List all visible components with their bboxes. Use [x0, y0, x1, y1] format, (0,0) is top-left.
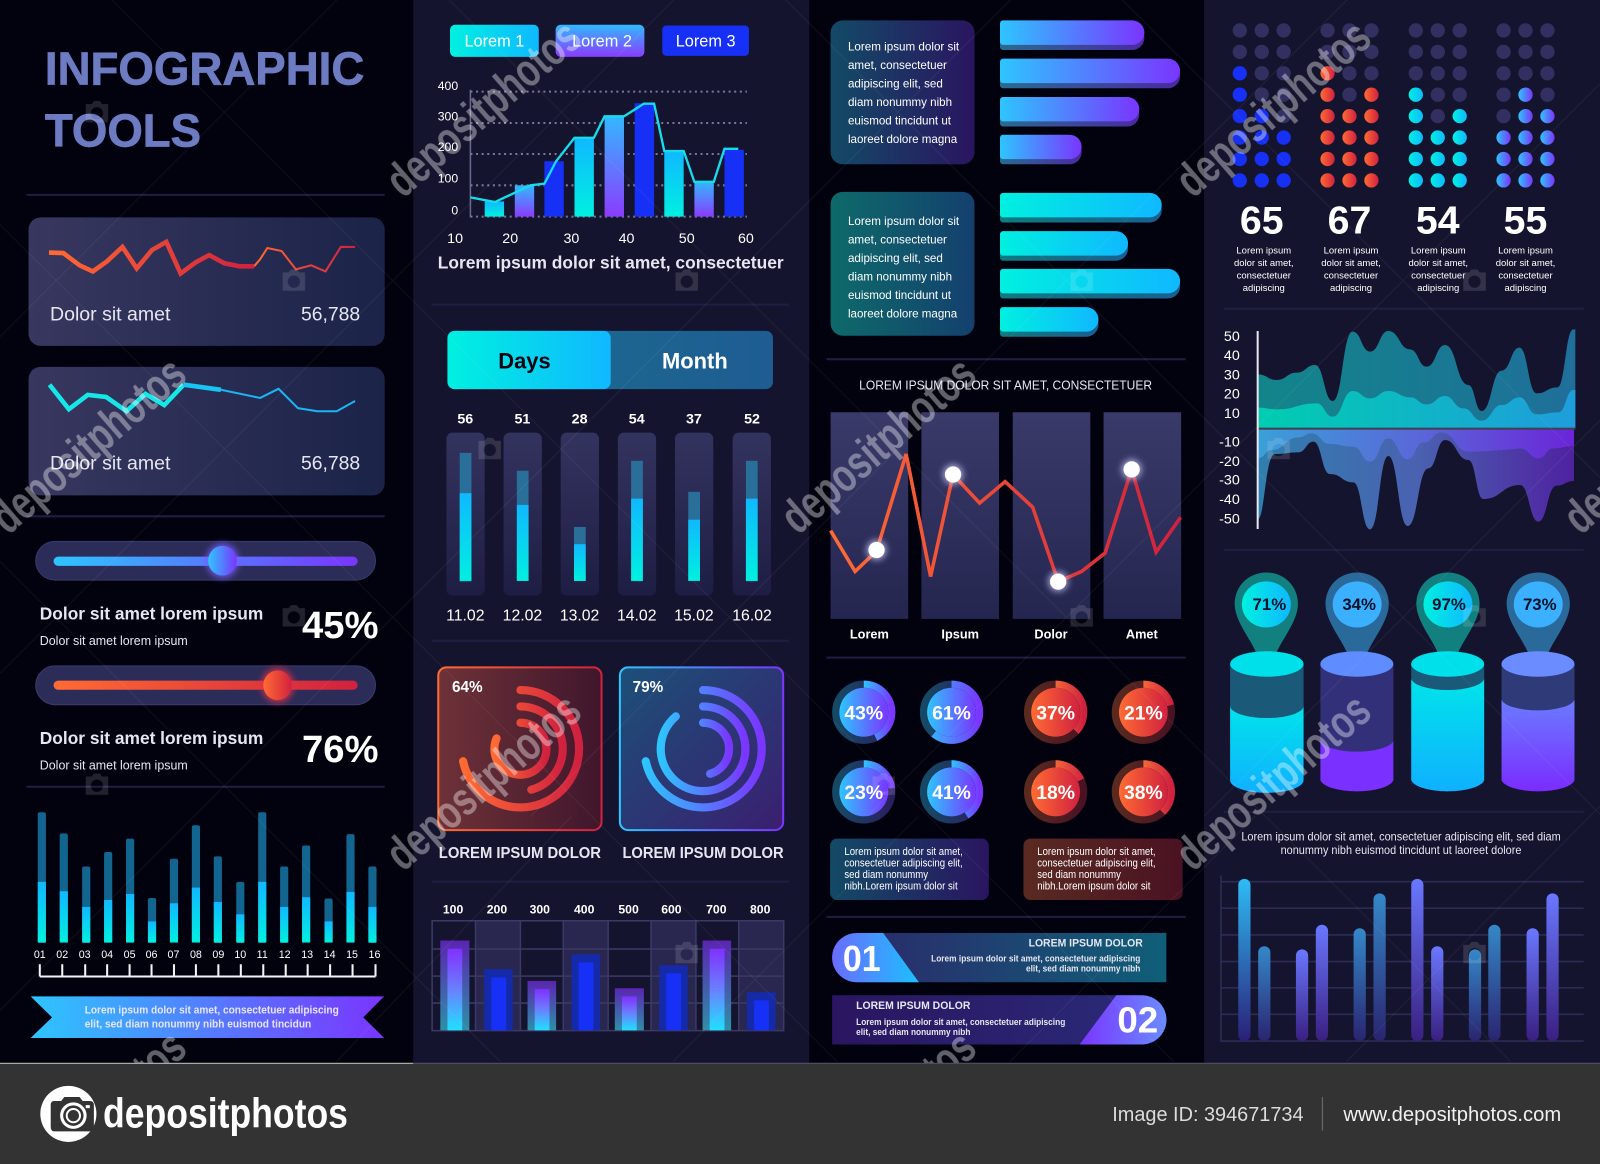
bar chart: 16 columns: 12: [279, 949, 291, 961]
title: TOOLS: [45, 104, 201, 156]
bar chart: 16 columns: 02: [56, 949, 68, 961]
area chart: mirrored: 20: [1224, 386, 1240, 402]
big numbers and captions: Lorem ipsum: [1498, 246, 1553, 257]
panel: sparkline card 1: 56,788: [301, 303, 360, 325]
note: red: [1023, 839, 1183, 900]
banner 02: [832, 995, 1166, 1044]
combo chart: bars and line: 20: [502, 231, 518, 247]
donut gauges: red: 18%: [1036, 782, 1075, 804]
panel: sparkline card 2: Dolor sit amet: [50, 452, 171, 474]
line chart over columns: Ipsum: [941, 626, 979, 641]
legend buttons: [450, 25, 749, 57]
footer bar: Image ID: 394671734: [1112, 1104, 1304, 1126]
pin cylinder: 73%: [1501, 572, 1574, 791]
note: blue: nibh.Lorem ipsum dolor sit: [844, 881, 958, 893]
panel: sparkline card 1: [29, 217, 385, 346]
slider 1 text: Dolor sit amet lorem ipsum: [40, 633, 188, 648]
bar chart: 16 columns: 13: [301, 949, 313, 961]
ribbon banner: [31, 996, 384, 1038]
area chart: mirrored: -50: [1219, 511, 1240, 527]
text box: purple: adipiscing elit, sed: [848, 78, 943, 91]
radial card: 79%: [620, 667, 783, 830]
big numbers and captions: consectetuer: [1498, 271, 1553, 282]
title: [45, 43, 364, 156]
radial card: 79%: 79%: [633, 679, 664, 696]
legend buttons: Lorem 2: [572, 32, 632, 50]
radial card captions: LOREM IPSUM DOLOR: [439, 845, 601, 862]
bar chart: 16 columns: 08: [190, 949, 202, 961]
area chart: mirrored: -10: [1219, 434, 1240, 450]
slider 1 text: [40, 603, 379, 648]
slider 2: [36, 666, 376, 705]
line chart over columns: [831, 412, 1181, 641]
bar chart: grid 100 to 800: 700: [706, 902, 727, 916]
pin cylinder: 73%: 73%: [1523, 595, 1557, 614]
banner 02: Lorem ipsum dolor sit amet, consectetuer adipiscing: [856, 1017, 1065, 1027]
combo chart: bars and line: [438, 79, 754, 247]
slider 2 text: 76%: [302, 728, 379, 770]
text box: purple: laoreet dolore magna: [848, 133, 958, 146]
combo chart: bars and line: 40: [619, 231, 635, 247]
bar chart: grid 100 to 800: 200: [487, 902, 507, 916]
bar chart: 16 columns: 16: [369, 949, 380, 961]
bar chart: 16 columns: 14: [324, 949, 336, 961]
text box: purple: Lorem ipsum dolor sit: [848, 41, 960, 54]
column chart: dates: 56: [457, 411, 473, 427]
big numbers and captions: 67: [1328, 198, 1371, 242]
watermark: stock photo overlay: depositphotos: [376, 683, 591, 880]
3d bars: cyan blue: [1000, 193, 1180, 337]
chart caption: Lorem ipsum dolor sit amet, consectetuer: [438, 252, 784, 272]
big numbers and captions: dolor sit amet,: [1496, 258, 1555, 269]
line chart over columns: Lorem: [850, 626, 889, 641]
radial card captions: [439, 845, 784, 862]
slider 2 text: [40, 728, 379, 772]
3d bars: blue purple: [1000, 20, 1180, 164]
text box: purple: [831, 20, 974, 164]
pin cylinder: 71%: 71%: [1253, 595, 1286, 614]
column chart: dates: [446, 411, 772, 624]
banner 02: elit, sed diam nonummy nibh: [856, 1027, 971, 1037]
note: red: Lorem ipsum dolor sit amet,: [1037, 846, 1156, 858]
bar chart: grid 100 to 800: [432, 902, 784, 1031]
toggle: days and month: [447, 331, 773, 389]
donut gauges: blue: 61%: [932, 702, 971, 724]
column chart: dates: 52: [744, 411, 760, 427]
bar chart: 16 columns: 03: [79, 949, 91, 961]
bar chart: 16 columns: 06: [146, 949, 158, 961]
text box: purple: amet, consectetuer: [848, 59, 947, 72]
combo chart: bars and line: 300: [438, 109, 458, 123]
column chart: dates: 14.02: [617, 607, 657, 624]
toggle: days and month: Month: [662, 348, 728, 373]
column chart: dates: 37: [686, 411, 702, 427]
donut gauges: blue: [836, 684, 980, 820]
text box: teal: adipiscing elit, sed: [848, 252, 943, 265]
bar chart: grid 100 to 800: 500: [618, 902, 639, 916]
banner 01: elit, sed diam nonummy nibh: [1026, 963, 1141, 973]
big numbers and captions: dolor sit amet,: [1321, 258, 1381, 269]
line chart over columns: Dolor: [1034, 626, 1068, 641]
note: blue: [830, 839, 989, 900]
column chart: dates: 54: [629, 411, 645, 427]
toggle: days and month: Days: [498, 348, 551, 373]
footer bar: www.depositphotos.com: [1342, 1104, 1561, 1126]
note: red: sed diam nonummy: [1037, 869, 1121, 881]
bar chart: 16 columns: [34, 812, 380, 977]
big numbers and captions: 54: [1416, 198, 1460, 242]
note: blue: sed diam nonummy: [844, 869, 929, 881]
pin cylinder: 34%: [1320, 572, 1393, 791]
big numbers and captions: adipiscing: [1243, 283, 1285, 294]
combo chart: bars and line: 30: [563, 231, 579, 247]
donut gauges: blue: 23%: [844, 782, 883, 804]
combo chart: bars and line: 0: [451, 203, 458, 217]
paragraph: [1241, 830, 1561, 857]
big numbers and captions: consectetuer: [1411, 271, 1465, 282]
donut gauges: red: 38%: [1124, 782, 1163, 804]
line chart heading: LOREM IPSUM DOLOR SIT AMET, CONSECTETUER: [859, 377, 1152, 392]
ribbon banner: Lorem ipsum dolor sit amet, consectetuer adipiscing: [85, 1004, 339, 1016]
bar chart: 16 columns: 11: [257, 949, 268, 961]
slider 2 text: Dolor sit amet lorem ipsum: [40, 728, 263, 748]
column chart: dates: 51: [515, 411, 530, 427]
banner 01: [832, 933, 1166, 982]
text box: teal: laoreet dolore magna: [848, 307, 958, 320]
combo chart: bars and line: 400: [438, 79, 458, 93]
slider 1 text: 45%: [302, 604, 379, 646]
donut gauges: blue: 41%: [932, 782, 971, 804]
donut gauges: red: 21%: [1124, 702, 1163, 724]
paragraph: Lorem ipsum dolor sit amet, consectetuer adipiscing elit, sed diam: [1241, 830, 1561, 843]
big numbers and captions: dolor sit amet,: [1234, 258, 1294, 269]
combo chart: bars and line: 200: [438, 140, 458, 154]
big numbers and captions: consectetuer: [1324, 271, 1378, 282]
area chart: mirrored: 30: [1224, 368, 1240, 384]
bar chart: 16 columns: 09: [212, 949, 224, 961]
bar chart: grid 100 to 800: 300: [530, 902, 550, 916]
bar chart: grid 100 to 800: 800: [750, 902, 771, 916]
area chart: mirrored: 10: [1224, 406, 1240, 422]
banner 01: 01: [843, 939, 881, 979]
footer logo: [40, 1086, 348, 1142]
area chart: mirrored: -30: [1219, 473, 1240, 489]
bar chart: 16 columns: 05: [124, 949, 136, 961]
big numbers and captions: adipiscing: [1504, 283, 1547, 294]
area chart: mirrored: -20: [1219, 454, 1240, 470]
watermark: stock photo overlay: depositphotos: [770, 347, 985, 543]
combo chart: bars and line: 50: [679, 231, 695, 247]
text box: purple: euismod tincidunt ut: [848, 114, 952, 127]
banner 01: Lorem ipsum dolor sit amet, consectetuer adipiscing: [931, 954, 1140, 964]
text box: teal: amet, consectetuer: [848, 233, 947, 246]
big numbers and captions: dolor sit amet,: [1409, 258, 1468, 269]
bar chart: 16 columns: 01: [34, 949, 46, 961]
footer bar: [0, 1063, 1600, 1164]
bar chart: 16 columns: 07: [168, 949, 179, 961]
bar chart: paired rounded bars: [1221, 876, 1584, 1041]
pin cylinder: 34%: 34%: [1342, 595, 1376, 614]
donut gauges: blue: 43%: [844, 702, 883, 724]
ribbon banner: elit, sed diam nonummy nibh euismod tincidun: [85, 1019, 311, 1031]
column chart: dates: 15.02: [674, 607, 714, 624]
line chart over columns: Amet: [1126, 626, 1159, 641]
text box: teal: [831, 192, 974, 336]
big numbers and captions: adipiscing: [1330, 283, 1372, 294]
bar chart: 16 columns: 10: [234, 949, 246, 961]
footer logo: depositphotos: [103, 1090, 348, 1137]
note: blue: Lorem ipsum dolor sit amet,: [844, 846, 963, 858]
area chart: mirrored: 50: [1224, 329, 1240, 345]
legend buttons: Lorem 1: [464, 32, 524, 50]
watermark: stock photo overlay: depositphotos: [1165, 683, 1380, 880]
radial card: 64%: 64%: [452, 679, 483, 696]
area chart: mirrored: -40: [1219, 492, 1240, 508]
area chart: mirrored: 40: [1224, 348, 1240, 364]
slider 2 text: Dolor sit amet lorem ipsum: [40, 757, 188, 772]
slider 1 text: Dolor sit amet lorem ipsum: [40, 603, 263, 623]
dot matrix: four pictograms: [1233, 23, 1555, 188]
combo chart: bars and line: 60: [738, 231, 754, 247]
bar chart: grid 100 to 800: 100: [443, 902, 463, 916]
column chart: dates: 28: [572, 411, 588, 427]
banner 02: 02: [1117, 1001, 1158, 1041]
legend buttons: Lorem 3: [676, 32, 736, 50]
donut gauges: red: [1028, 684, 1171, 820]
bar chart: 16 columns: 04: [101, 949, 113, 961]
big numbers and captions: Lorem ipsum: [1236, 246, 1291, 257]
big numbers and captions: Lorem ipsum: [1324, 246, 1378, 257]
combo chart: bars and line: 100: [438, 172, 458, 186]
banner 01: LOREM IPSUM DOLOR: [1029, 937, 1143, 949]
title: INFOGRAPHIC: [45, 43, 364, 95]
note: blue: consectetuer adipiscing elit,: [844, 858, 963, 870]
big numbers and captions: [1234, 198, 1555, 294]
paragraph: nonummy nibh euismod tincidunt ut laoreet dolore: [1281, 844, 1521, 857]
panel: sparkline card 2: [29, 367, 385, 495]
big numbers and captions: 65: [1240, 198, 1284, 242]
pin cylinder: 71%: [1230, 572, 1304, 793]
text box: purple: diam nonummy nibh: [848, 96, 952, 109]
big numbers and captions: Lorem ipsum: [1411, 246, 1466, 257]
pin cylinder: 97%: 97%: [1432, 595, 1466, 614]
column chart: dates: 16.02: [732, 607, 772, 624]
text box: teal: Lorem ipsum dolor sit: [848, 215, 960, 228]
text box: teal: diam nonummy nibh: [848, 271, 952, 284]
column chart: dates: 11.02: [446, 607, 484, 624]
radial card captions: LOREM IPSUM DOLOR: [622, 845, 784, 862]
area chart: mirrored: [1219, 329, 1575, 529]
big numbers and captions: 55: [1504, 198, 1547, 242]
bar chart: 16 columns: 15: [346, 949, 358, 961]
column chart: dates: 12.02: [503, 607, 542, 624]
big numbers and captions: adipiscing: [1417, 283, 1459, 294]
big numbers and captions: consectetuer: [1237, 271, 1291, 282]
panel: sparkline card 2: 56,788: [301, 452, 360, 474]
panel: sparkline card 1: Dolor sit amet: [50, 303, 171, 325]
banner 02: LOREM IPSUM DOLOR: [856, 1000, 970, 1012]
note: red: nibh.Lorem ipsum dolor sit: [1037, 881, 1151, 893]
donut gauges: red: 37%: [1036, 702, 1075, 724]
combo chart: bars and line: 10: [447, 231, 463, 247]
note: red: consectetuer adipiscing elit,: [1037, 858, 1156, 870]
bar chart: grid 100 to 800: 600: [661, 902, 682, 916]
radial card: 64%: [438, 667, 602, 830]
bar chart: grid 100 to 800: 400: [574, 902, 595, 916]
column chart: dates: 13.02: [560, 607, 599, 624]
slider 1: [36, 541, 376, 580]
pin cylinder: 97%: [1411, 572, 1484, 791]
text box: teal: euismod tincidunt ut: [848, 289, 952, 302]
